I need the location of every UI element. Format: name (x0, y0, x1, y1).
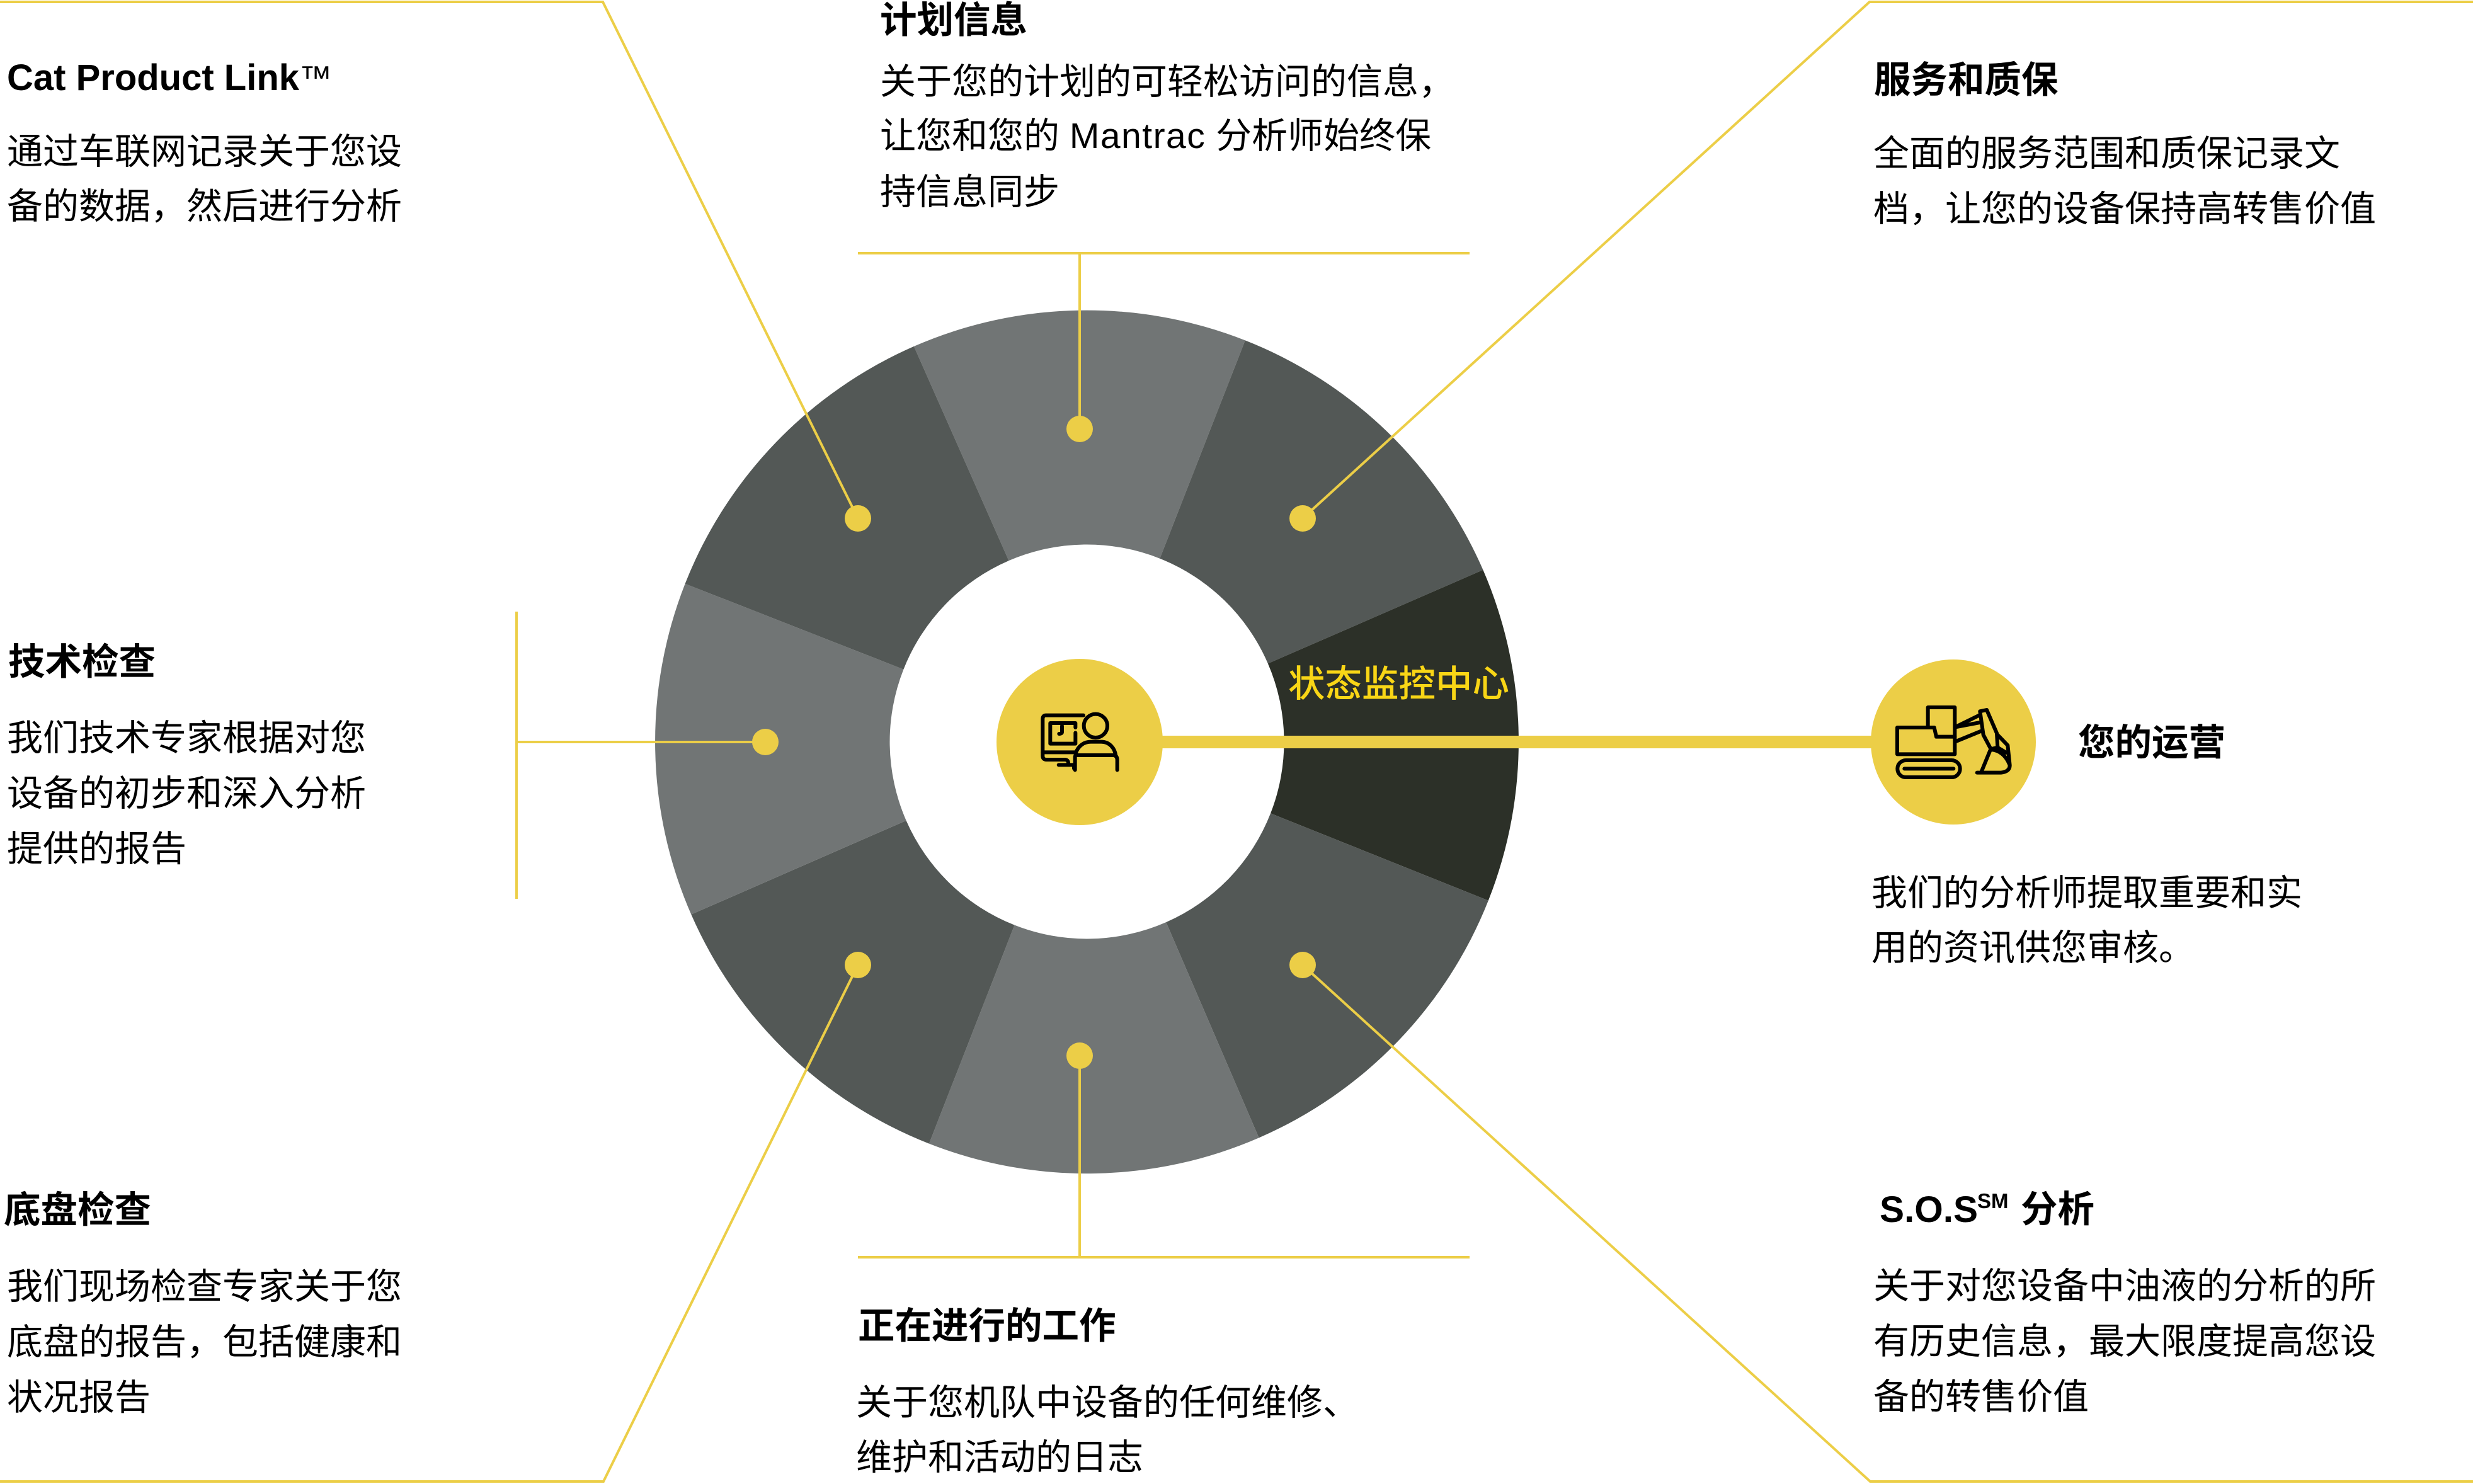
body text: 关于您的计划的可轻松访问的信息， (880, 62, 1454, 102)
dot: Cat Product Link (845, 505, 871, 532)
body text: 有历史信息，最大限度提高您设 (1873, 1321, 2376, 1362)
heading: 正在进行的工作 (858, 1306, 1116, 1347)
body text: 关于您机队中设备的任何维修、 (856, 1383, 1359, 1423)
panel: your operations (1871, 722, 2302, 968)
dot: work in progress (1066, 1042, 1093, 1069)
heading: 服务和质保 (1874, 60, 2059, 101)
heading: S.O.S (1880, 1189, 1978, 1230)
segment: Cat Product Link (685, 346, 1009, 670)
panel: technical inspection (7, 642, 366, 869)
body text: 备的转售价值 (1873, 1377, 2089, 1417)
heading: 技术检查 (8, 642, 156, 683)
panel: planning information (880, 0, 1454, 212)
leader line: undercarriage inspection (0, 965, 858, 1481)
leader line: work in progress (858, 1056, 1470, 1257)
body text: 提供的报告 (7, 829, 186, 869)
panel: S.O.S analysis (1873, 1189, 2376, 1417)
body text: 全面的服务范围和质保记录文 (1873, 134, 2340, 174)
icon: excavator (1871, 659, 2036, 825)
segment: work in progress (929, 922, 1259, 1173)
dot: undercarriage inspection (845, 952, 871, 978)
heading: 分析 (2021, 1189, 2094, 1230)
leader line: Cat Product Link (0, 2, 858, 518)
body text: 底盘的报告，包括健康和 (7, 1322, 402, 1362)
body text: 档，让您的设备保持高转售价值 (1873, 189, 2376, 229)
leader line: service and warranty (1303, 2, 2473, 518)
leader line: technical inspection (517, 612, 765, 899)
icon: analyst at monitor (997, 659, 1163, 825)
dot: planning information (1066, 416, 1093, 442)
heading: 计划信息 (880, 0, 1027, 41)
body text: 设备的初步和深入分析 (7, 773, 366, 814)
heading: SM (1977, 1189, 2008, 1213)
segment: condition monitoring center (1268, 570, 1519, 901)
heading: 您的运营 (2078, 722, 2225, 763)
panel: service and warranty (1873, 60, 2376, 229)
dot: S.O.S analysis (1289, 952, 1316, 978)
label: condition monitoring center: 状态监控中心 (1288, 664, 1509, 705)
body text: 用的资讯供您审核。 (1871, 928, 2195, 968)
body text: 我们的分析师提取重要和实 (1871, 873, 2302, 913)
dot: service and warranty (1289, 505, 1316, 532)
segment: technical inspection (655, 584, 906, 915)
segment: S.O.S analysis (1166, 813, 1488, 1138)
body text: 我们现场检查专家关于您 (7, 1267, 402, 1307)
panel: work in progress (856, 1306, 1359, 1478)
dot: technical inspection (752, 729, 779, 755)
heading: 底盘检查 (4, 1190, 151, 1231)
wheel: segmented ring (655, 311, 1519, 1173)
segment: service and warranty (1160, 340, 1483, 664)
body text: 维护和活动的日志 (856, 1437, 1143, 1478)
leader line: S.O.S analysis (1303, 965, 2473, 1481)
body text: 状况报告 (7, 1378, 151, 1418)
body text: 让您和您的 Mantrac 分析师始终保 (880, 116, 1431, 156)
leader line: planning information (858, 253, 1470, 429)
heading: ™ (299, 60, 332, 96)
body text: 持信息同步 (880, 172, 1059, 212)
body text: 备的数据，然后进行分析 (7, 186, 402, 227)
connector bar from center to operations (1080, 736, 1953, 748)
panel: Cat Product Link (7, 57, 402, 227)
panel: undercarriage inspection (4, 1190, 402, 1418)
segment: undercarriage inspection (691, 821, 1015, 1144)
body text: 关于对您设备中油液的分析的所 (1873, 1266, 2376, 1306)
heading: Cat Product Link (7, 57, 299, 98)
segment: planning information (914, 311, 1245, 561)
body text: 我们技术专家根据对您 (7, 718, 366, 758)
body text: 通过车联网记录关于您设 (7, 132, 402, 172)
dots on the wheel segments (752, 416, 1316, 1069)
